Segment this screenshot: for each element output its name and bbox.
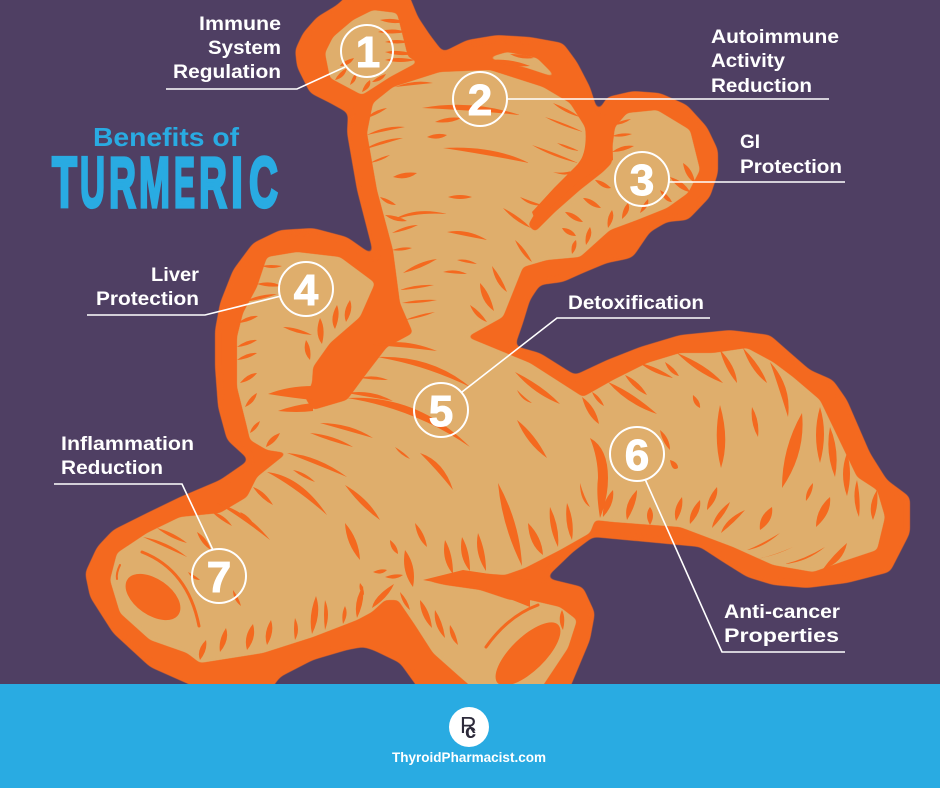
benefit 1: immune system regulation: Immune xyxy=(199,14,281,35)
benefit 5: detoxification: 5 xyxy=(429,387,453,436)
benefit 2: autoimmune activity reduction: 2 xyxy=(468,76,492,125)
benefit 2: autoimmune activity reduction: Reduction xyxy=(711,76,812,97)
heading: turmeric: E xyxy=(174,144,195,223)
benefit 3: gi protection: Protection xyxy=(740,157,842,178)
benefit 5: detoxification: Detoxification xyxy=(568,293,704,314)
benefit 3: gi protection xyxy=(615,132,845,206)
turmeric root illustration xyxy=(85,0,910,695)
logo badge: c xyxy=(465,721,476,743)
benefit 2: autoimmune activity reduction: Autoimmune xyxy=(711,27,839,48)
benefit 1: immune system regulation: Regulation xyxy=(173,62,281,83)
title xyxy=(52,122,278,223)
heading: turmeric: R xyxy=(199,144,227,223)
benefit 7: inflammation reduction: 7 xyxy=(207,553,231,602)
benefit 4: liver protection xyxy=(87,262,333,316)
benefit 6: anti-cancer properties: Anti-cancer xyxy=(724,602,841,623)
heading: turmeric: M xyxy=(139,144,170,223)
benefit 7: inflammation reduction: Inflammation xyxy=(61,434,194,455)
benefit 2: autoimmune activity reduction xyxy=(453,27,839,126)
rim lines on the cut ends xyxy=(117,552,538,647)
benefit 4: liver protection: Liver xyxy=(151,265,200,286)
heading: turmeric: C xyxy=(249,144,278,223)
benefit 4: liver protection: Protection xyxy=(96,289,199,310)
heading: turmeric: T xyxy=(52,144,77,223)
benefit 5: detoxification xyxy=(414,293,710,437)
benefit 1: immune system regulation: 1 xyxy=(356,28,380,77)
heading: turmeric xyxy=(52,144,278,223)
heading: turmeric: R xyxy=(109,144,136,223)
benefit 4: liver protection: 4 xyxy=(294,266,319,315)
website: ThyroidPharmacist.com xyxy=(392,749,546,765)
fibre streaks xyxy=(143,19,878,660)
benefit 1: immune system regulation xyxy=(166,14,393,89)
benefit 7: inflammation reduction xyxy=(54,434,246,603)
logo badge xyxy=(449,707,489,747)
benefit 3: gi protection: 3 xyxy=(630,156,654,205)
cut end openings xyxy=(117,564,570,695)
benefit 2: autoimmune activity reduction: Activity xyxy=(711,51,785,72)
logo badge: R xyxy=(460,712,477,738)
benefit 6: anti-cancer properties: Properties xyxy=(724,626,839,647)
heading: turmeric: U xyxy=(80,144,105,223)
benefit 6: anti-cancer properties: 6 xyxy=(625,431,649,480)
heading: benefits of: Benefits of xyxy=(93,122,239,152)
benefit 1: immune system regulation: System xyxy=(208,38,281,59)
benefit 7: inflammation reduction: Reduction xyxy=(61,458,163,479)
benefit 6: anti-cancer properties xyxy=(610,427,845,652)
benefit 3: gi protection: GI xyxy=(740,132,760,153)
footer band xyxy=(0,684,940,788)
heading: turmeric: I xyxy=(231,144,243,223)
